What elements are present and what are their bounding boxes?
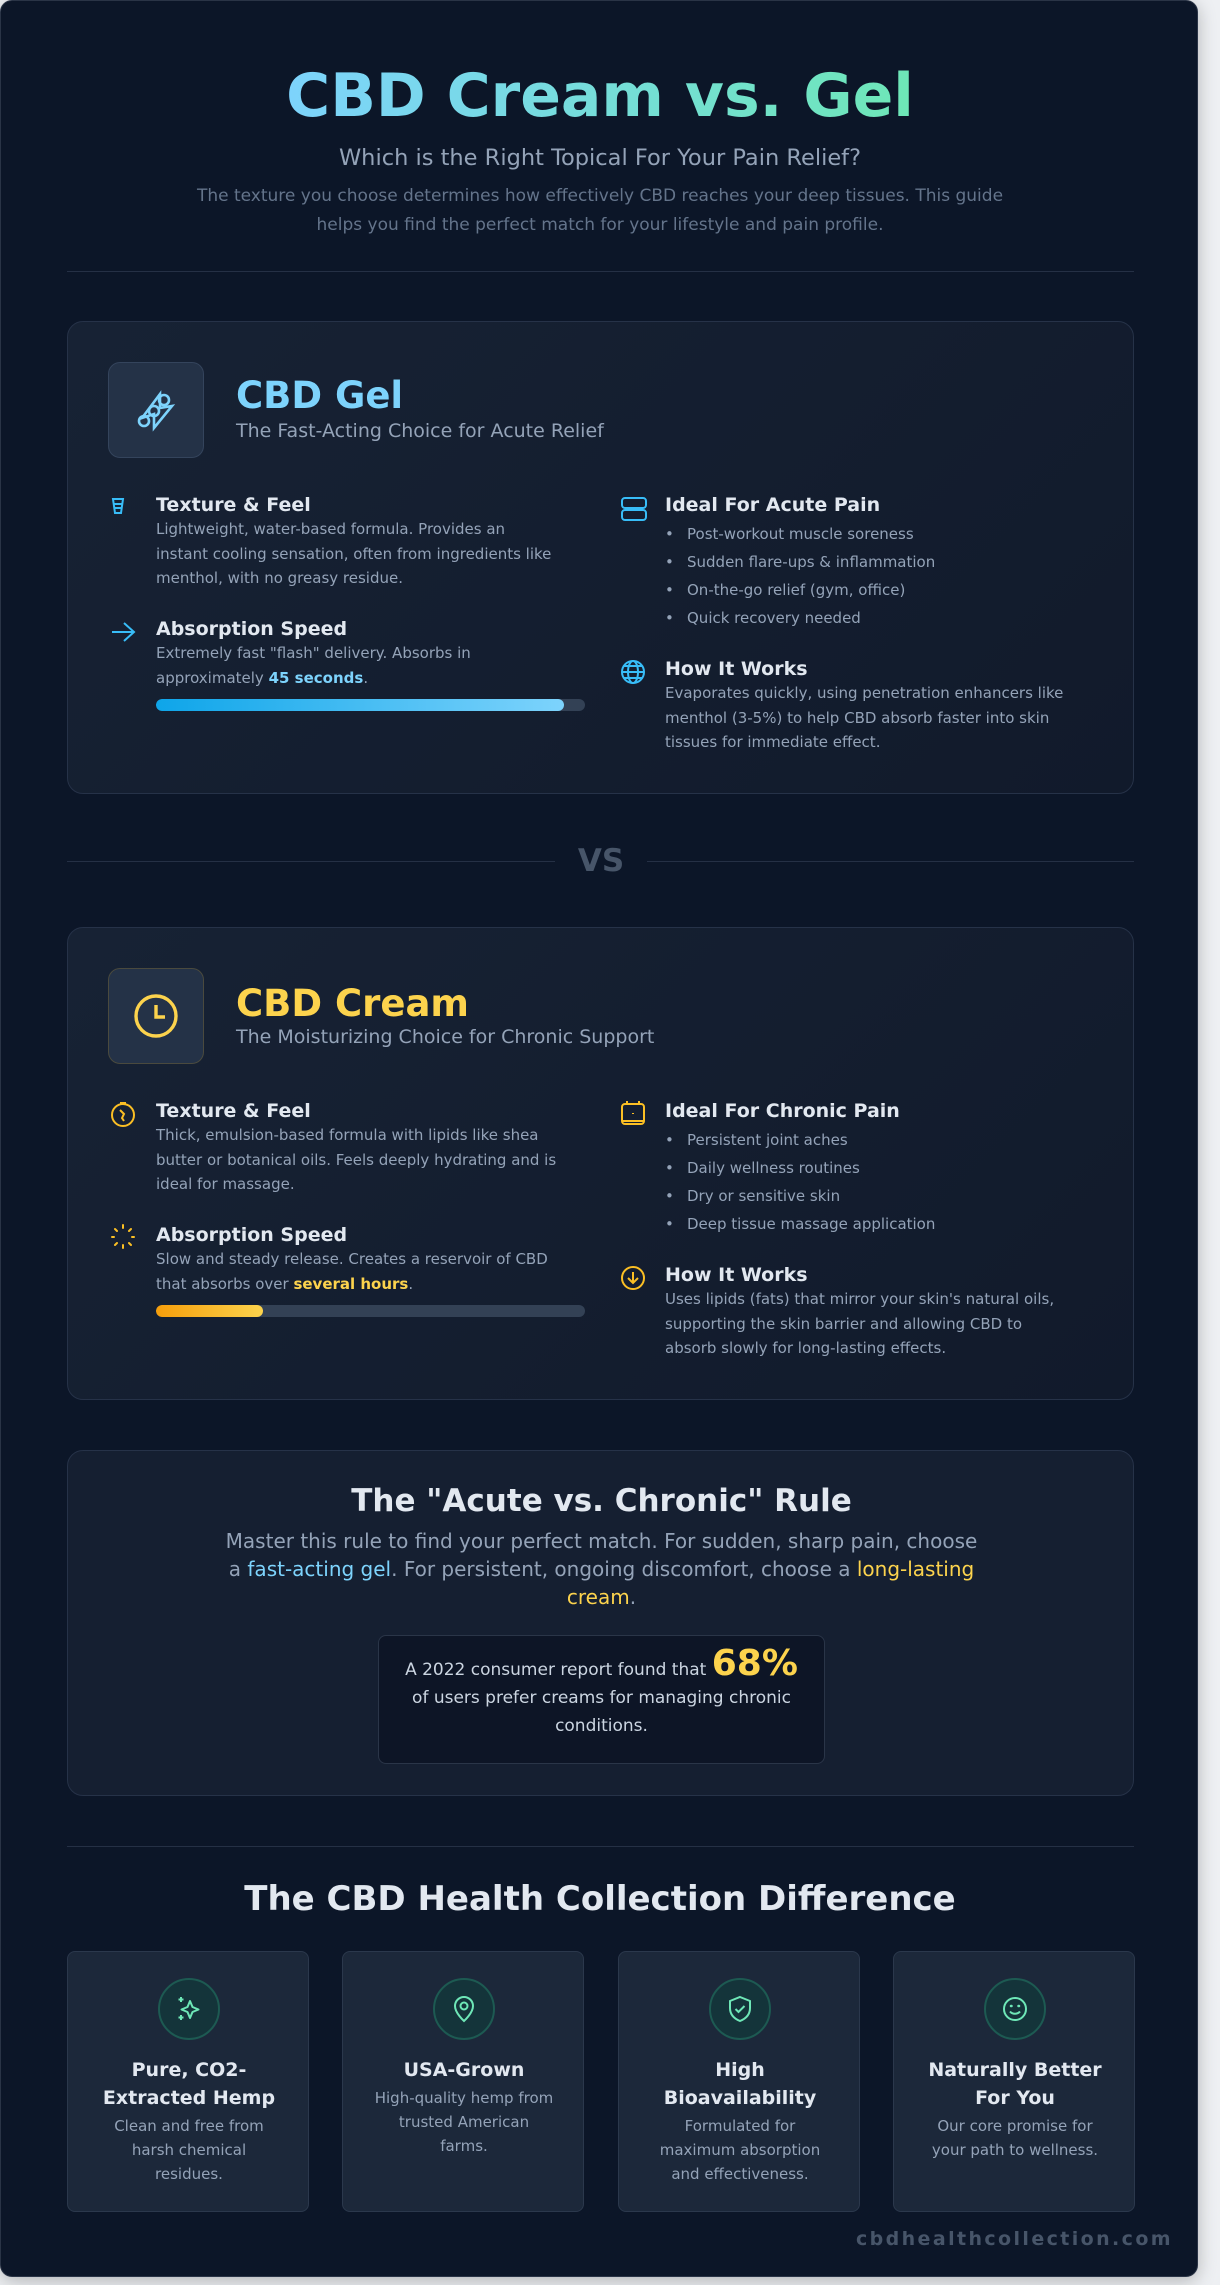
block: how gel works: menthol (3-5%) to help CBD absorb faster into skin — [665, 708, 1049, 726]
block: how gel works: How It Works — [665, 658, 808, 680]
block: ideal acute: Quick recovery needed — [687, 609, 861, 627]
feature card: bioavailability: Bioavailability — [664, 2087, 816, 2109]
stat box: conditions. — [555, 1716, 648, 1736]
block: texture: Lightweight, water-based formula. Provides an — [156, 520, 505, 538]
feature card: naturally better: Our core promise for — [937, 2117, 1093, 2135]
block: cream texture — [111, 1100, 556, 1193]
block: ideal chronic: Dry or sensitive skin — [687, 1187, 840, 1205]
intro text: helps you find the perfect match for your lifestyle and pain profile. — [317, 214, 883, 234]
rule text: Master this rule to find your perfect match. For sudden, sharp pain, choose — [226, 1529, 977, 1553]
feature card: bioavailability: and effectiveness. — [671, 2165, 809, 2183]
block: ideal acute: Sudden flare-ups & inflammation — [687, 553, 935, 571]
block: how gel works — [621, 658, 1063, 751]
cream subtitle: The Moisturizing Choice for Chronic Support — [236, 1026, 654, 1048]
block: how gel works: Evaporates quickly, using penetration enhancers like — [665, 684, 1063, 702]
feature card: usa: High-quality hemp from — [375, 2089, 553, 2107]
icon: smile — [984, 1978, 1046, 2040]
block: absorption: approximately 45 seconds. — [156, 668, 368, 686]
feature card: naturally better — [893, 1951, 1135, 2212]
feature card: bioavailability: maximum absorption — [660, 2141, 820, 2159]
block: ideal acute: On-the-go relief (gym, office) — [687, 581, 905, 599]
stat box — [378, 1635, 825, 1764]
rule text: a fast-acting gel. For persistent, ongoing discomfort, choose a long-lasting — [229, 1557, 974, 1581]
icon: pin — [433, 1978, 495, 2040]
block: cream absorption — [111, 1224, 548, 1292]
block: texture: instant cooling sensation, often from ingredients like — [156, 544, 551, 562]
block: cream texture: butter or botanical oils. Feels deeply hydrating and is — [156, 1150, 556, 1168]
vs divider: VS — [578, 843, 624, 879]
feature card: pure — [67, 1951, 309, 2212]
feature card: usa: USA-Grown — [404, 2059, 524, 2081]
block: how cream works: How It Works — [665, 1264, 808, 1286]
feature card: pure: Extracted Hemp — [103, 2087, 275, 2109]
block: ideal chronic: Daily wellness routines — [687, 1159, 860, 1177]
block: absorption — [112, 618, 471, 686]
stat box: A 2022 consumer report found that 68% — [405, 1643, 798, 1684]
feature card: pure: residues. — [155, 2165, 223, 2183]
block: ideal acute — [621, 494, 935, 627]
block: absorption: Extremely fast "flash" delivery. Absorbs in — [156, 644, 471, 662]
feature card: bioavailability: Formulated for — [685, 2117, 795, 2135]
block: ideal chronic — [621, 1100, 935, 1233]
rule text — [226, 1529, 977, 1609]
feature card: pure: harsh chemical — [132, 2141, 246, 2159]
block: texture — [112, 494, 551, 587]
block: how cream works: Uses lipids (fats) that mirror your skin's natural oils, — [665, 1290, 1054, 1308]
cream title: CBD Cream — [236, 982, 469, 1025]
intro text: The texture you choose determines how effectively CBD reaches your deep tissues. This guide — [197, 186, 1003, 206]
feature card: usa: trusted American — [399, 2113, 529, 2131]
subtitle: Which is the Right Topical For Your Pain Relief? — [339, 145, 861, 171]
block: texture: Texture & Feel — [156, 494, 311, 516]
gel subtitle: The Fast-Acting Choice for Acute Relief — [236, 420, 604, 442]
footer url: cbdhealthcollection.com — [856, 2228, 1173, 2250]
icon: gel — [108, 362, 204, 458]
rule text: cream. — [567, 1585, 636, 1609]
block: ideal chronic: Persistent joint aches — [687, 1131, 848, 1149]
progress bar cream — [156, 1305, 585, 1317]
feature card: pure: Clean and free from — [114, 2117, 264, 2135]
block: cream absorption: that absorbs over several hours. — [156, 1274, 413, 1292]
block: ideal chronic: Ideal For Chronic Pain — [665, 1100, 900, 1122]
icon: clock — [108, 968, 204, 1064]
feature card: usa: farms. — [440, 2137, 488, 2155]
block: how cream works: absorb slowly for long-lasting effects. — [665, 1339, 946, 1357]
block: absorption: Absorption Speed — [156, 618, 347, 640]
feature card: bioavailability — [618, 1951, 860, 2212]
icon: shield — [709, 1978, 771, 2040]
feature card: bioavailability: High — [715, 2059, 765, 2081]
block: how cream works: supporting the skin barrier and allowing CBD to — [665, 1314, 1022, 1332]
block: cream texture: Thick, emulsion-based formula with lipids like shea — [156, 1126, 538, 1144]
title: CBD Cream vs. Gel — [286, 61, 914, 131]
rule title: The "Acute vs. Chronic" Rule — [351, 1483, 852, 1519]
block: cream absorption: Slow and steady release. Creates a reservoir of CBD — [156, 1250, 548, 1268]
progress bar gel — [156, 699, 585, 711]
feature card: naturally better: For You — [975, 2087, 1055, 2109]
block: cream texture: Texture & Feel — [156, 1100, 311, 1122]
feature card: naturally better: your path to wellness. — [932, 2141, 1098, 2159]
icon: sparkle — [158, 1978, 220, 2040]
intro text — [196, 186, 1003, 234]
block: how cream works — [621, 1264, 1054, 1357]
feature card: naturally better: Naturally Better — [928, 2059, 1102, 2081]
block: how gel works: tissues for immediate effect. — [665, 733, 880, 751]
gel title: CBD Gel — [236, 374, 403, 417]
block: ideal chronic: Deep tissue massage application — [687, 1215, 935, 1233]
panel: CBD Gel — [67, 321, 1134, 794]
panel: CBD Cream — [67, 927, 1134, 1400]
panel: acute vs chronic rule — [67, 1450, 1134, 1796]
block: ideal acute: Post-workout muscle soreness — [687, 525, 914, 543]
difference heading: The CBD Health Collection Difference — [244, 1879, 956, 1919]
block: cream absorption: Absorption Speed — [156, 1224, 347, 1246]
block: texture: menthol, with no greasy residue. — [156, 569, 403, 587]
feature card: usa — [342, 1951, 584, 2212]
stat box: of users prefer creams for managing chronic — [412, 1688, 791, 1708]
block: cream texture: ideal for massage. — [156, 1175, 295, 1193]
feature card: pure: Pure, CO2- — [132, 2059, 246, 2081]
block: ideal acute: Ideal For Acute Pain — [665, 494, 880, 516]
